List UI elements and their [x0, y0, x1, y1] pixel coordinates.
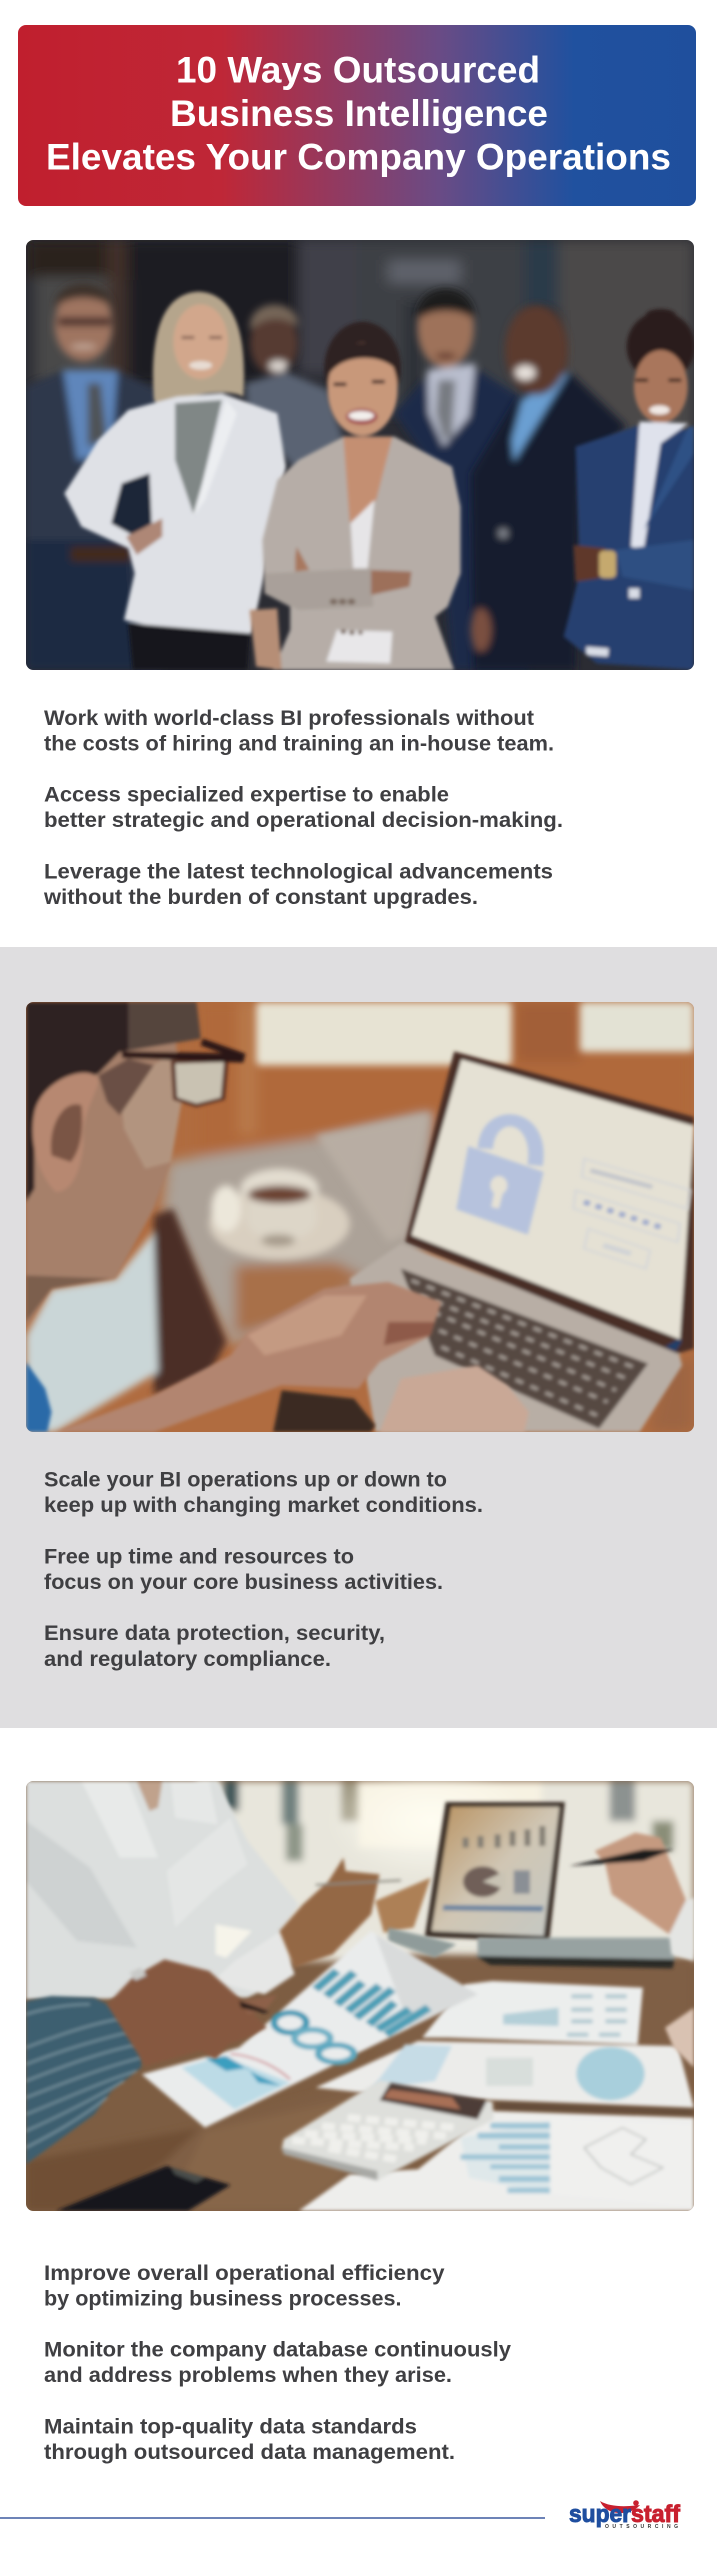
blonde woman in white blazer — [64, 292, 286, 670]
smiling woman in beige blazer, front — [250, 322, 461, 670]
man's head, ear and glasses — [26, 1002, 245, 1327]
title — [46, 48, 671, 178]
phone on table — [56, 2166, 230, 2211]
shirt collar stripes — [26, 1362, 52, 1432]
text block: benefits 1 to 3: better strategic and operational decision-making. — [44, 809, 563, 832]
woman's white shirt — [26, 1781, 299, 1999]
logo: SuperStaff Outsourcing: OUTSOURCING — [605, 2524, 678, 2530]
text block: benefits 4 to 6 — [44, 1468, 483, 1671]
man's hand holding pen — [107, 1959, 277, 2066]
text block: benefits 7 to 10: and address problems when they arise. — [44, 2364, 452, 2387]
table documents — [299, 1981, 694, 2211]
text block: benefits 7 to 10: by optimizing business processes. — [44, 2288, 402, 2310]
title: Business Intelligence — [170, 92, 548, 134]
text block: benefits 4 to 6: keep up with changing market conditions. — [44, 1494, 483, 1517]
photo: business team standing together — [26, 240, 694, 670]
text block: benefits 7 to 10: Monitor the company database continuously — [44, 2338, 511, 2362]
logo: SuperStaff Outsourcing — [569, 2500, 681, 2530]
text block: benefits 4 to 6: Free up time and resources to — [44, 1546, 354, 1568]
text block: benefits 1 to 3: Leverage the latest technological advancements — [44, 860, 553, 884]
text block: benefits 4 to 6: Ensure data protection, security, — [44, 1622, 385, 1645]
man in navy suit and striped tie — [395, 289, 529, 670]
text block: benefits 4 to 6: Scale your BI operations up or down to — [44, 1468, 447, 1492]
text block: benefits 4 to 6: focus on your core business activities. — [44, 1571, 443, 1594]
title banner — [18, 25, 696, 206]
laptop — [350, 1051, 694, 1432]
table surface — [26, 1954, 694, 2211]
woman in grey, back — [245, 305, 343, 473]
laptop under tablet — [388, 1928, 674, 1968]
panel: grey section background — [0, 947, 717, 1728]
typing hands — [56, 1282, 529, 1432]
text block: benefits 7 to 10: Maintain top-quality data standards — [44, 2416, 417, 2438]
bright window background — [196, 1764, 694, 1961]
text block: benefits 4 to 6: and regulatory compliance. — [44, 1648, 331, 1671]
man with glasses, back left — [26, 284, 162, 670]
logo: SuperStaff Outsourcing: super — [569, 2501, 631, 2528]
logo: SuperStaff Outsourcing: staff — [631, 2501, 681, 2528]
photo: analysts reviewing charts at a table — [26, 1781, 694, 2211]
text block: benefits 1 to 3: Work with world-class BI professionals without — [44, 707, 534, 730]
right person's hand and pen — [569, 1833, 694, 1961]
title: 10 Ways Outsourced — [176, 48, 540, 90]
woman's hand and pen — [279, 1858, 431, 1968]
man's striped sleeve — [26, 1996, 143, 2164]
bald man in dark suit — [471, 305, 627, 670]
woman in navy blazer, right — [564, 309, 695, 670]
text block: benefits 1 to 3 — [43, 707, 563, 909]
text block: benefits 1 to 3: the costs of hiring and training an in-house team. — [44, 732, 554, 756]
text block: benefits 1 to 3: Access specialized expertise to enable — [44, 784, 449, 806]
footer divider line — [0, 2517, 545, 2519]
tablet with charts — [425, 1802, 565, 1942]
text block: benefits 7 to 10: through outsourced data management. — [44, 2441, 455, 2464]
title: Elevates Your Company Operations — [46, 136, 671, 178]
text block: benefits 7 to 10 — [44, 2262, 511, 2464]
photo: man typing on laptop with lock screen — [26, 1002, 694, 1432]
text block: benefits 7 to 10: Improve overall operational efficiency — [44, 2262, 445, 2285]
calculator — [282, 2080, 494, 2180]
login form fields — [573, 1159, 691, 1269]
padlock on screen — [456, 1120, 544, 1235]
hand-held chart sheet — [142, 1931, 478, 2128]
coffee cup and saucer — [209, 1169, 350, 1260]
soft pink sleeve bottom right — [665, 2008, 694, 2068]
text block: benefits 1 to 3: without the burden of constant upgrades. — [43, 886, 478, 909]
